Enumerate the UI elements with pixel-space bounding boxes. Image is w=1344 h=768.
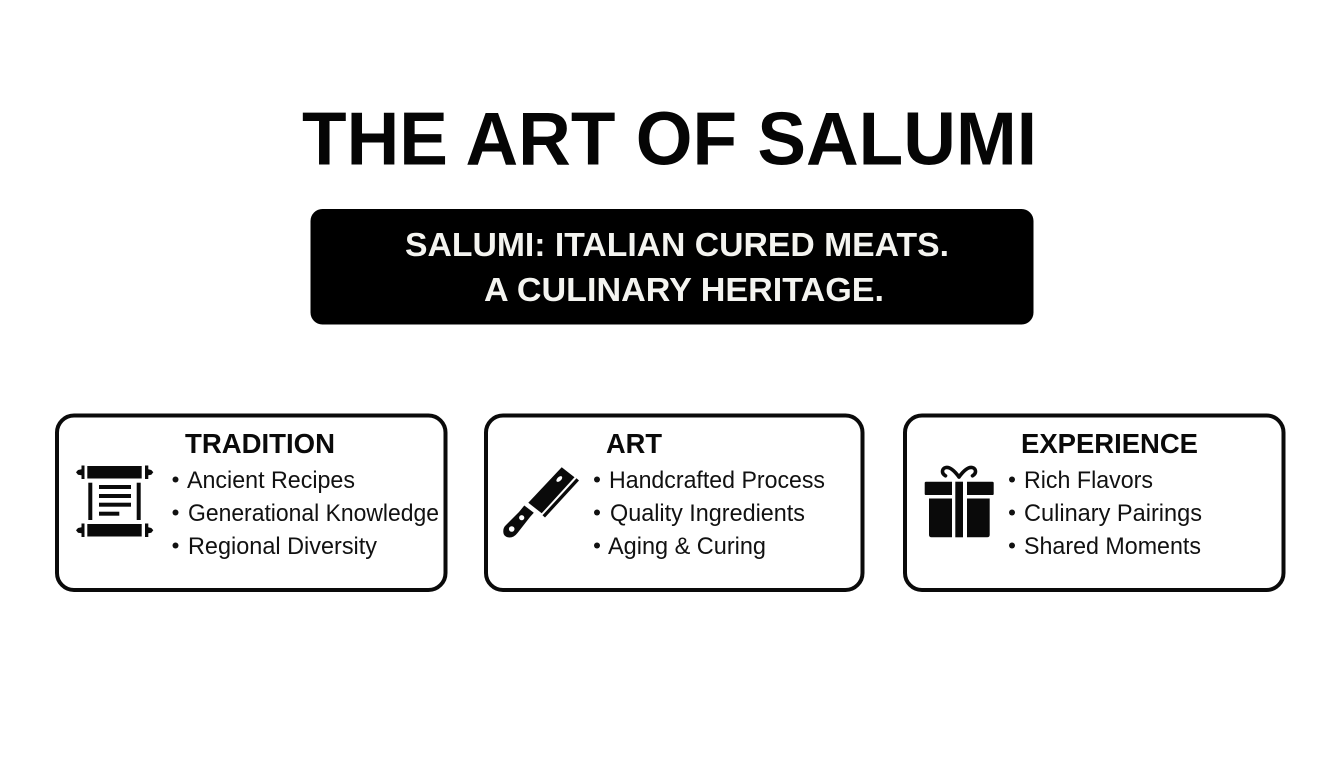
subtitle line 1: SALUMI: ITALIAN CURED MEATS. bbox=[405, 226, 949, 263]
heading: experience: EXPERIENCE bbox=[1021, 428, 1198, 459]
bullet list: experience bbox=[1009, 467, 1202, 560]
heading: tradition: TRADITION bbox=[185, 428, 335, 459]
bullet list: art bbox=[594, 467, 825, 560]
panel: tradition bbox=[57, 416, 446, 590]
bullet list: tradition: Ancient Recipes bbox=[187, 467, 355, 494]
bullet list: experience: Shared Moments bbox=[1024, 533, 1201, 560]
panel: experience bbox=[905, 416, 1284, 590]
bullet list: tradition: Regional Diversity bbox=[188, 533, 377, 560]
panel: art bbox=[486, 416, 862, 590]
bullet list: art: Handcrafted Process bbox=[609, 467, 825, 494]
subtitle line 2: A CULINARY HERITAGE. bbox=[484, 271, 884, 308]
bullet list: art: Quality Ingredients bbox=[610, 500, 805, 527]
bullet list: experience: Rich Flavors bbox=[1024, 467, 1153, 494]
icon: scroll bbox=[76, 466, 153, 537]
bullet list: tradition bbox=[172, 467, 439, 560]
heading: art: ART bbox=[606, 428, 662, 459]
icon: cleaver knife bbox=[503, 467, 579, 538]
panel: subtitle banner bbox=[310, 209, 1034, 324]
bullet list: experience: Culinary Pairings bbox=[1024, 500, 1202, 527]
bullet list: tradition: Generational Knowledge bbox=[188, 500, 439, 527]
title: THE ART OF SALUMI bbox=[302, 96, 1037, 180]
icon: gift box bbox=[925, 467, 994, 537]
bullet list: art: Aging & Curing bbox=[608, 533, 766, 560]
